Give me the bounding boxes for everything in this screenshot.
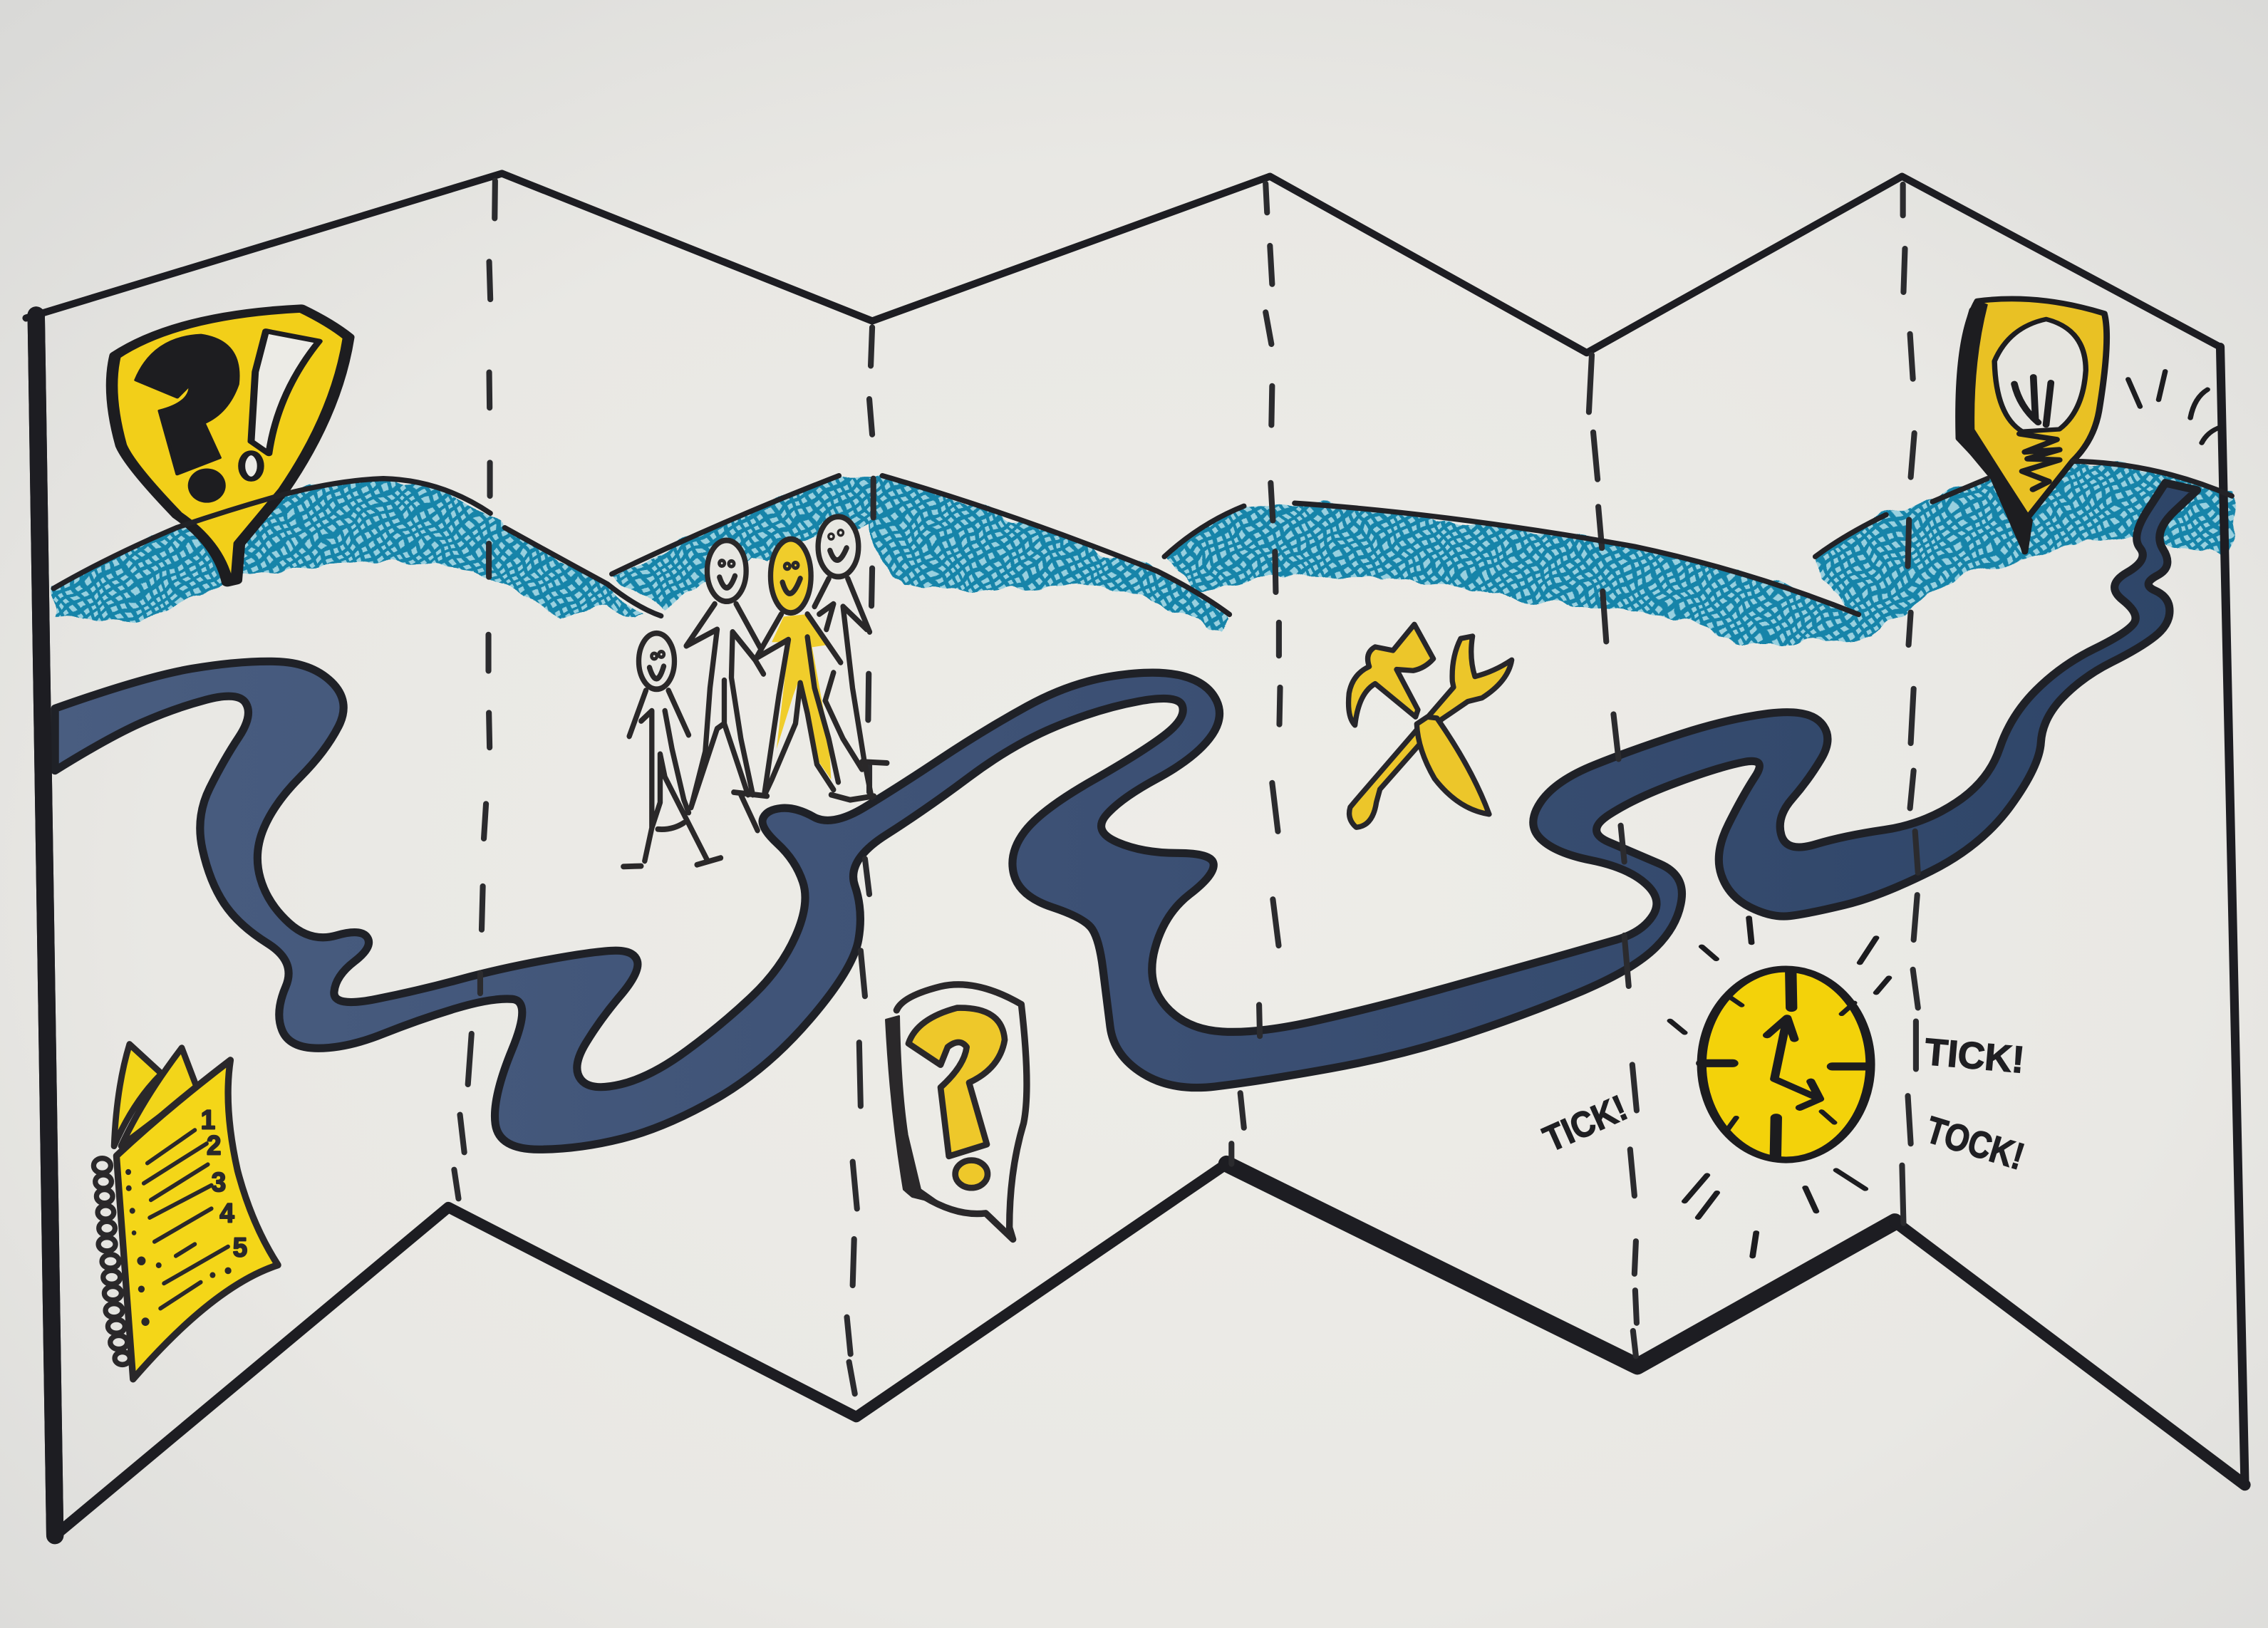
notebook writing lines bbox=[144, 1130, 228, 1308]
icon: clock with radiating ticks bbox=[1670, 918, 1889, 1256]
person: yellow figure bbox=[755, 539, 874, 800]
clock hour marks bbox=[1702, 970, 1869, 1158]
bubble outline bbox=[896, 985, 1027, 1239]
people walking hand in hand bbox=[623, 517, 887, 866]
person: back figure bbox=[814, 517, 887, 797]
label: tick left: TICK! bbox=[1537, 1087, 1633, 1159]
icon: question mark speech bubble bbox=[886, 985, 1027, 1239]
notebook numbers: 2 bbox=[207, 1130, 221, 1161]
notebook numbers: 5 bbox=[233, 1232, 247, 1263]
person: adult bbox=[686, 540, 767, 831]
hatched hills band bbox=[53, 461, 2232, 643]
label: tock right: TOCK! bbox=[1921, 1109, 2029, 1178]
notebook numbers: 4 bbox=[219, 1198, 234, 1228]
label: tick right: TICK! bbox=[1923, 1031, 2026, 1082]
notebook numbers bbox=[201, 1104, 247, 1263]
icon: question and exclamation map pin bbox=[112, 309, 348, 583]
clock hands bbox=[1767, 1017, 1820, 1108]
fold lines bbox=[454, 181, 1918, 1394]
question mark bbox=[908, 1008, 1005, 1156]
winding river bbox=[55, 483, 2197, 1149]
icon: spiral notebook with numbered list bbox=[93, 1044, 278, 1379]
person: child bbox=[623, 633, 720, 866]
notebook numbers: 3 bbox=[212, 1167, 226, 1197]
notebook spiral binding bbox=[93, 1158, 130, 1364]
icon: crossed tools bbox=[1349, 624, 1512, 827]
icon: light bulb map pin bbox=[1957, 299, 2221, 552]
notebook back pages bbox=[114, 1044, 197, 1146]
notebook dots bbox=[125, 1169, 232, 1326]
left border over river bbox=[36, 315, 55, 1535]
clock face bbox=[1702, 969, 1870, 1160]
notebook front page bbox=[116, 1060, 278, 1379]
notebook numbers: 1 bbox=[201, 1104, 215, 1135]
hill ridge lines bbox=[53, 461, 2232, 616]
radiating ticks bbox=[1670, 918, 1889, 1256]
